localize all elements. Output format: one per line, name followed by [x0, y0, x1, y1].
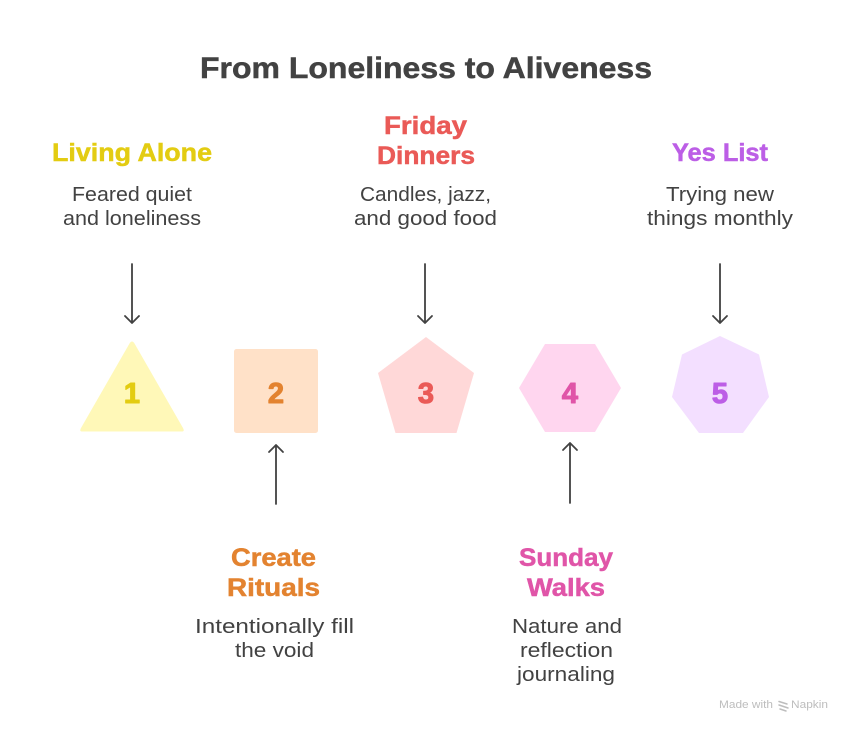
heading: sunday walks [519, 544, 613, 602]
description: friday dinners: Candles, jazz, [360, 184, 491, 206]
heading: sunday walks: Walks [527, 574, 605, 602]
arrow: down to triangle [125, 264, 139, 323]
number 3: 3 [418, 378, 434, 410]
description: yes list: Trying new [666, 184, 775, 206]
arrow: up to hexagon [563, 443, 577, 503]
description: living alone [63, 184, 201, 230]
icon: purple heptagon [672, 336, 769, 433]
footer: made with napkin: Napkin [791, 699, 828, 711]
description: living alone: and loneliness [63, 208, 201, 230]
step 5: yes list [647, 139, 793, 433]
description: create rituals [195, 616, 354, 662]
heading: friday dinners [377, 112, 475, 170]
footer: made with napkin [719, 699, 828, 711]
step 1: living alone [52, 139, 212, 432]
number 1: 1 [124, 378, 140, 410]
heading: friday dinners: Dinners [377, 142, 475, 170]
footer: made with napkin: Made with [719, 699, 773, 711]
icon: napkin logo [779, 702, 788, 711]
icon: pink hexagon [519, 344, 621, 432]
heading: create rituals: Rituals [227, 574, 320, 602]
icon: orange square [234, 349, 318, 433]
description: living alone: Feared quiet [72, 184, 192, 206]
heading: create rituals: Create [231, 544, 316, 572]
heading: sunday walks: Sunday [519, 544, 613, 572]
description: yes list [647, 184, 793, 230]
number 4: 4 [562, 378, 578, 410]
description: create rituals: Intentionally fill [195, 616, 354, 638]
arrow: down to heptagon [713, 264, 727, 323]
description: sunday walks: Nature and [512, 616, 622, 638]
heading: friday dinners: Friday [384, 112, 467, 140]
heading: living alone: Living Alone [52, 139, 212, 167]
heading: yes list: Yes List [672, 139, 769, 167]
number 5: 5 [712, 378, 728, 410]
step 2: create rituals [195, 349, 354, 662]
description: sunday walks [512, 616, 622, 686]
title: From Loneliness to Aliveness [200, 52, 652, 85]
description: sunday walks: reflection [520, 640, 613, 662]
step 3: friday dinners [354, 112, 497, 433]
arrow: down to pentagon [418, 264, 432, 323]
description: yes list: things monthly [647, 208, 793, 230]
heading: create rituals [227, 544, 320, 602]
description: friday dinners [354, 184, 497, 230]
description: friday dinners: and good food [354, 208, 497, 230]
icon: yellow triangle [80, 342, 184, 432]
step 4: sunday walks [512, 344, 622, 686]
icon: red pentagon [378, 337, 474, 433]
description: sunday walks: journaling [516, 664, 615, 686]
description: create rituals: the void [235, 640, 314, 662]
number 2: 2 [268, 378, 284, 410]
arrow: up to square [269, 445, 283, 504]
